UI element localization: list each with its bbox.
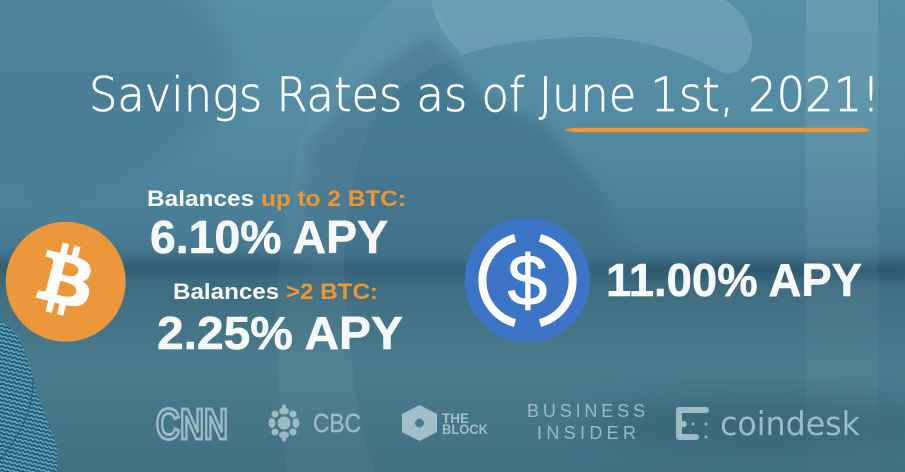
logo: The Block: [402, 405, 488, 441]
title: Savings Rates as of June 1st, 2021!: [89, 68, 880, 123]
logo: The Block: THE: [442, 411, 469, 426]
logo: Business Insider: BUSINESS: [527, 401, 645, 421]
logo: CBC: CBC: [313, 408, 361, 438]
logo: Business Insider: [527, 401, 645, 443]
rate: 11.00% APY: 11.00% APY: [606, 254, 862, 306]
logo: CNN: CNN: [156, 400, 228, 449]
logo: CBC: [268, 404, 361, 442]
panel: USDC rate: [465, 218, 862, 343]
decorative large translucent arc: [276, 0, 752, 472]
press logos: [156, 400, 861, 449]
rate: 2.25% APY: 2.25% APY: [157, 307, 403, 359]
person's shoulder at lower left: [0, 322, 57, 472]
rate: 6.10% APY: 6.10% APY: [150, 211, 388, 263]
panel: bitcoin rates: [6, 186, 406, 359]
logo: The Block: BLOCK: [442, 422, 488, 437]
icon: USDC: $: [508, 242, 547, 321]
logo: Business Insider: INSIDER: [537, 423, 636, 443]
decorative vertical translucent strip: [806, 0, 878, 472]
title underline: [564, 128, 870, 132]
logo: CoinDesk: coindesk: [720, 404, 861, 443]
icon: USDC: [465, 218, 590, 343]
label: balances up to 2 BTC: Balances up to 2 BTC:: [147, 186, 406, 211]
label: balances over 2 BTC: Balances >2 BTC:: [173, 279, 378, 304]
icon: bitcoin: [6, 222, 126, 342]
